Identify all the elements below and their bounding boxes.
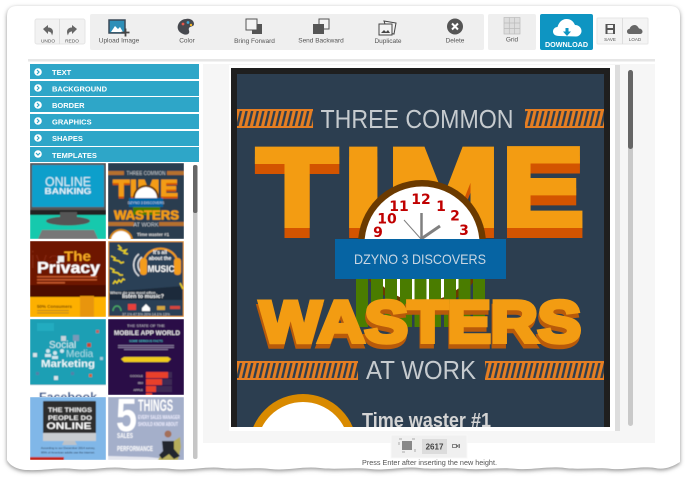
infographic frame [231,68,610,427]
thumbnail: music: 37.1% 47.5% 20% 14.1% 13% [122,312,170,316]
clock numbers: 12 [411,192,431,208]
thumbnail: mobile app world: SOME SERIOUS FACTS [129,339,163,343]
thumbnail: online banking: ONLINE [45,174,91,189]
panel: sidebar accordion [30,64,199,162]
thumbnail: time wasters: THREE COMMON [126,171,166,177]
thumbnail: the things people do online [30,397,106,460]
thumbnail: time wasters: TIME [113,177,178,203]
thumbnail: social media marketing: Social [49,340,76,351]
thumbnail: time wasters [108,163,184,239]
thumbnail: music: MUSIC [148,264,175,274]
text: time waster #1: Time waster #1 [362,410,491,432]
heading: TIME: T [256,135,338,259]
thumbnail: time wasters: DZYNO 3 DISCOVERS [128,201,165,205]
toolbar panel: Send Backward [298,38,344,44]
thumbnail: mobile app world [108,319,184,395]
thumbnail: 5 things: 5 [116,389,137,441]
icon: send backward [313,19,329,34]
thumbnail: the things people do online: ONLINE [46,421,92,431]
thumbnail: time wasters: WASTERS [114,208,179,222]
clock numbers: 1 [436,199,446,215]
thumbnail: the privacy [30,241,106,317]
download button: DOWNLOAD [545,40,588,49]
clock numbers: 10 [377,212,397,228]
undo redo buttons: UNDO [41,38,55,44]
heading: TIME: T [256,125,338,249]
thumbnail: 5 things: EVERY SALES MANAGER [138,415,180,421]
panel: sidebar accordion: BACKGROUND [52,84,108,94]
toolbar panel: Color [179,38,196,44]
thumbnail: the things people do online: According to our December 2014 survey, [41,446,95,450]
icon: load [627,25,642,34]
save load buttons [597,18,648,44]
panel: sidebar accordion: GRAPHICS [52,118,92,126]
header stripes top [237,109,604,128]
clock numbers: 3 [459,223,469,239]
thumbnail: mobile app world: IBM [138,381,143,385]
thumbnail: social media marketing: Facebook [39,390,97,404]
green bars [356,279,485,327]
heading: TIME [254,146,582,238]
toolbar panel: Bring Forward [234,38,275,45]
thumbnail: time wasters: AT WORK [133,222,159,228]
hint text: Press Enter after inserting the new height. [362,460,497,467]
panel: sidebar accordion: BORDER [52,101,85,110]
heading: TIME: I [342,125,384,249]
height control: 2617 [426,442,444,452]
thumbnail: social media marketing: Media [66,349,94,360]
circle badge [253,394,353,427]
icon: undo [43,25,53,36]
heading: WASTERS: WASTERS [260,290,581,355]
icon: duplicate [379,21,396,35]
icon: resize [399,439,415,452]
banner: dzyno 3 discovers: DZYNO 3 DISCOVERS [354,251,486,267]
thumbnail: 5 things [108,397,184,460]
clock numbers: 11 [389,199,409,215]
thumbnail: the things people do online: 85% of American adults use the internet. [41,450,95,454]
grid button: Grid [506,36,519,44]
clock [358,180,486,308]
height control [391,435,467,458]
thumbnail: online banking [30,163,106,239]
heading: TIME: I [342,135,384,259]
banner: dzyno 3 discovers [335,239,506,279]
infographic artwork [237,109,604,427]
thumbnail: music: It's all [153,250,168,256]
save load buttons: LOAD [629,37,642,42]
icon: save [606,24,615,34]
toolbar panel: Upload Image [99,38,140,44]
toolbar panel: Delete [446,38,465,44]
icon: delete [447,18,463,34]
clock numbers: 2 [450,208,460,224]
thumbnail: 5 things: SALES [117,433,133,440]
thumbnail: mobile app world: GOOGLE [130,374,143,378]
undo redo buttons [35,19,85,44]
icon: arrow [452,444,460,448]
toolbar panel: Duplicate [374,38,402,45]
divider [28,59,655,62]
thumbnail: music [108,241,184,317]
thumbnail: 5 things: SHOULD KNOW ABOUT [138,422,178,428]
thumbnail: 5 things: PERFORMANCE [117,446,153,453]
panel: sidebar accordion: TEMPLATES [52,151,97,160]
thumbnail: music: about the [149,256,171,262]
thumbnail: the things people do online: PEOPLE DO [48,415,92,422]
thumbnail: the things people do online: THE THINGS [48,407,93,414]
panel: sidebar accordion: SHAPES [52,134,83,143]
thumbnail: the privacy: ivacy [30,247,85,274]
thumbnail: the privacy: Privacy [37,260,100,277]
thumbnail: social media marketing [30,319,106,404]
thumbnail: time wasters: TIME [113,175,178,201]
icon: bring forward [246,19,262,34]
clock numbers: 9 [373,225,383,241]
thumbnail: social media marketing: Marketing [41,359,95,370]
panel: sidebar accordion: TEXT [52,68,72,77]
heading: WASTERS: WASTERS [259,294,580,360]
thumbnail: mobile app world: APPLE [133,388,143,392]
undo redo buttons: REDO [65,38,79,44]
thumbnail: music: listen to music? [122,294,165,300]
thumbnail: the privacy: The [64,248,91,264]
thumbnail: the privacy: 50% Consumers [37,304,73,309]
sidebar scrollbar [193,165,198,459]
icon: redo [67,25,77,36]
thumbnail: music: Where do you most often [110,291,156,295]
heading: three common: THREE COMMON [320,104,514,134]
save load buttons: SAVE [604,37,616,42]
heading: TIME: M [387,136,500,260]
heading: TIME: M [387,126,500,250]
heading: TIME: E [502,135,584,259]
thumbnail: time wasters: Time waster #1 [137,232,170,237]
canvas scrollbar [628,70,633,426]
heading: at work: AT WORK [366,355,477,385]
toolbar panel [90,14,484,50]
thumbnail: 5 things: THINGS [138,396,173,415]
grid button [488,14,536,50]
clock numbers [374,194,468,237]
thumbnail: mobile app world: MOBILE APP WORLD [114,331,181,337]
heading: TIME: E [502,125,584,249]
thumbnail: online banking: BANKING [44,186,92,196]
thumbnail: mobile app world: THE STATE OF THE [127,323,165,328]
icon: upload image [109,20,130,36]
icon: color palette [178,19,194,35]
header stripes bottom [237,361,604,380]
clock hands [404,213,440,239]
panel: canvas area [203,64,655,443]
download button [540,14,593,50]
